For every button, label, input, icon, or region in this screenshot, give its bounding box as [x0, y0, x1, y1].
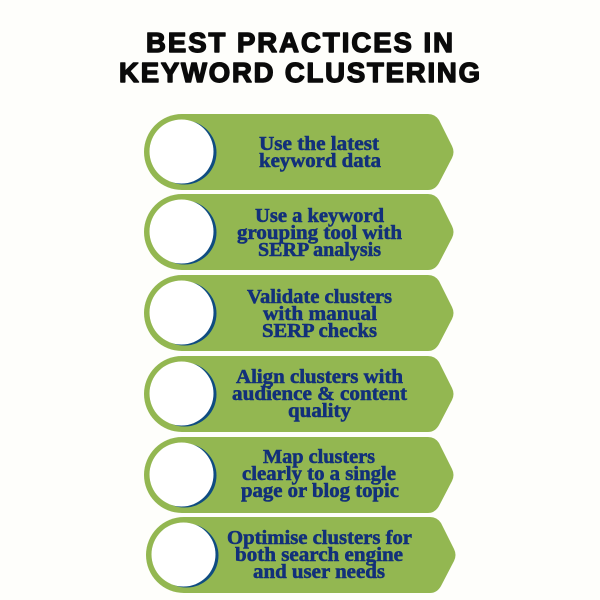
step 6 text [227, 527, 412, 583]
step 1 tag shape [144, 114, 454, 190]
step 4 tag shape [144, 356, 454, 432]
step 1 circle [150, 120, 216, 184]
step 4 text: quality [288, 400, 352, 422]
step 2 text: Use a keyword [255, 205, 385, 227]
step 3 text: with manual [263, 303, 377, 325]
step 5 text: Map clusters [263, 446, 375, 468]
step 1 text: keyword data [259, 150, 381, 172]
step 4 circle [150, 362, 216, 426]
step 2: use a keyword grouping tool [144, 194, 454, 270]
step 5 text: page or blog topic [241, 480, 399, 502]
step 3 text: SERP checks [262, 320, 377, 342]
step 6: optimise clusters [146, 517, 456, 593]
step 3 tag shape [144, 275, 454, 351]
step 5: map clusters [144, 437, 454, 513]
step 2 circle [150, 200, 216, 264]
step 1 text: Use the latest [259, 133, 379, 155]
title: BEST PRACTICES IN [146, 27, 453, 58]
step 4 text: Align clusters with [236, 366, 404, 388]
step 5 text [241, 446, 399, 502]
step 5 circle [150, 442, 216, 508]
step 2 text: SERP analysis [258, 239, 381, 261]
step 1: use the latest keyword data [144, 114, 454, 190]
step 6 text: and user needs [253, 561, 385, 583]
step 4 text: audience & content [232, 383, 407, 405]
step 6 tag shape [146, 517, 456, 593]
step 5 text: clearly to a single [242, 463, 396, 485]
step 3 text [247, 286, 392, 342]
step 6 text: Optimise clusters for [227, 527, 412, 549]
step 5 tag shape [144, 437, 454, 513]
title [119, 27, 480, 88]
title: KEYWORD CLUSTERING [119, 57, 480, 88]
step 3 text: Validate clusters [247, 286, 392, 308]
step 4: align clusters [144, 356, 454, 432]
step 2 tag shape [144, 194, 454, 270]
step 6 text: both search engine [235, 544, 403, 566]
step 3 circle [150, 280, 216, 346]
step 4 text [232, 366, 407, 422]
step 2 text: grouping tool with [237, 222, 403, 244]
step 6 circle [152, 522, 218, 588]
step 2 text [237, 205, 403, 261]
step 1 text [259, 133, 381, 172]
step 3: validate clusters [144, 275, 454, 351]
